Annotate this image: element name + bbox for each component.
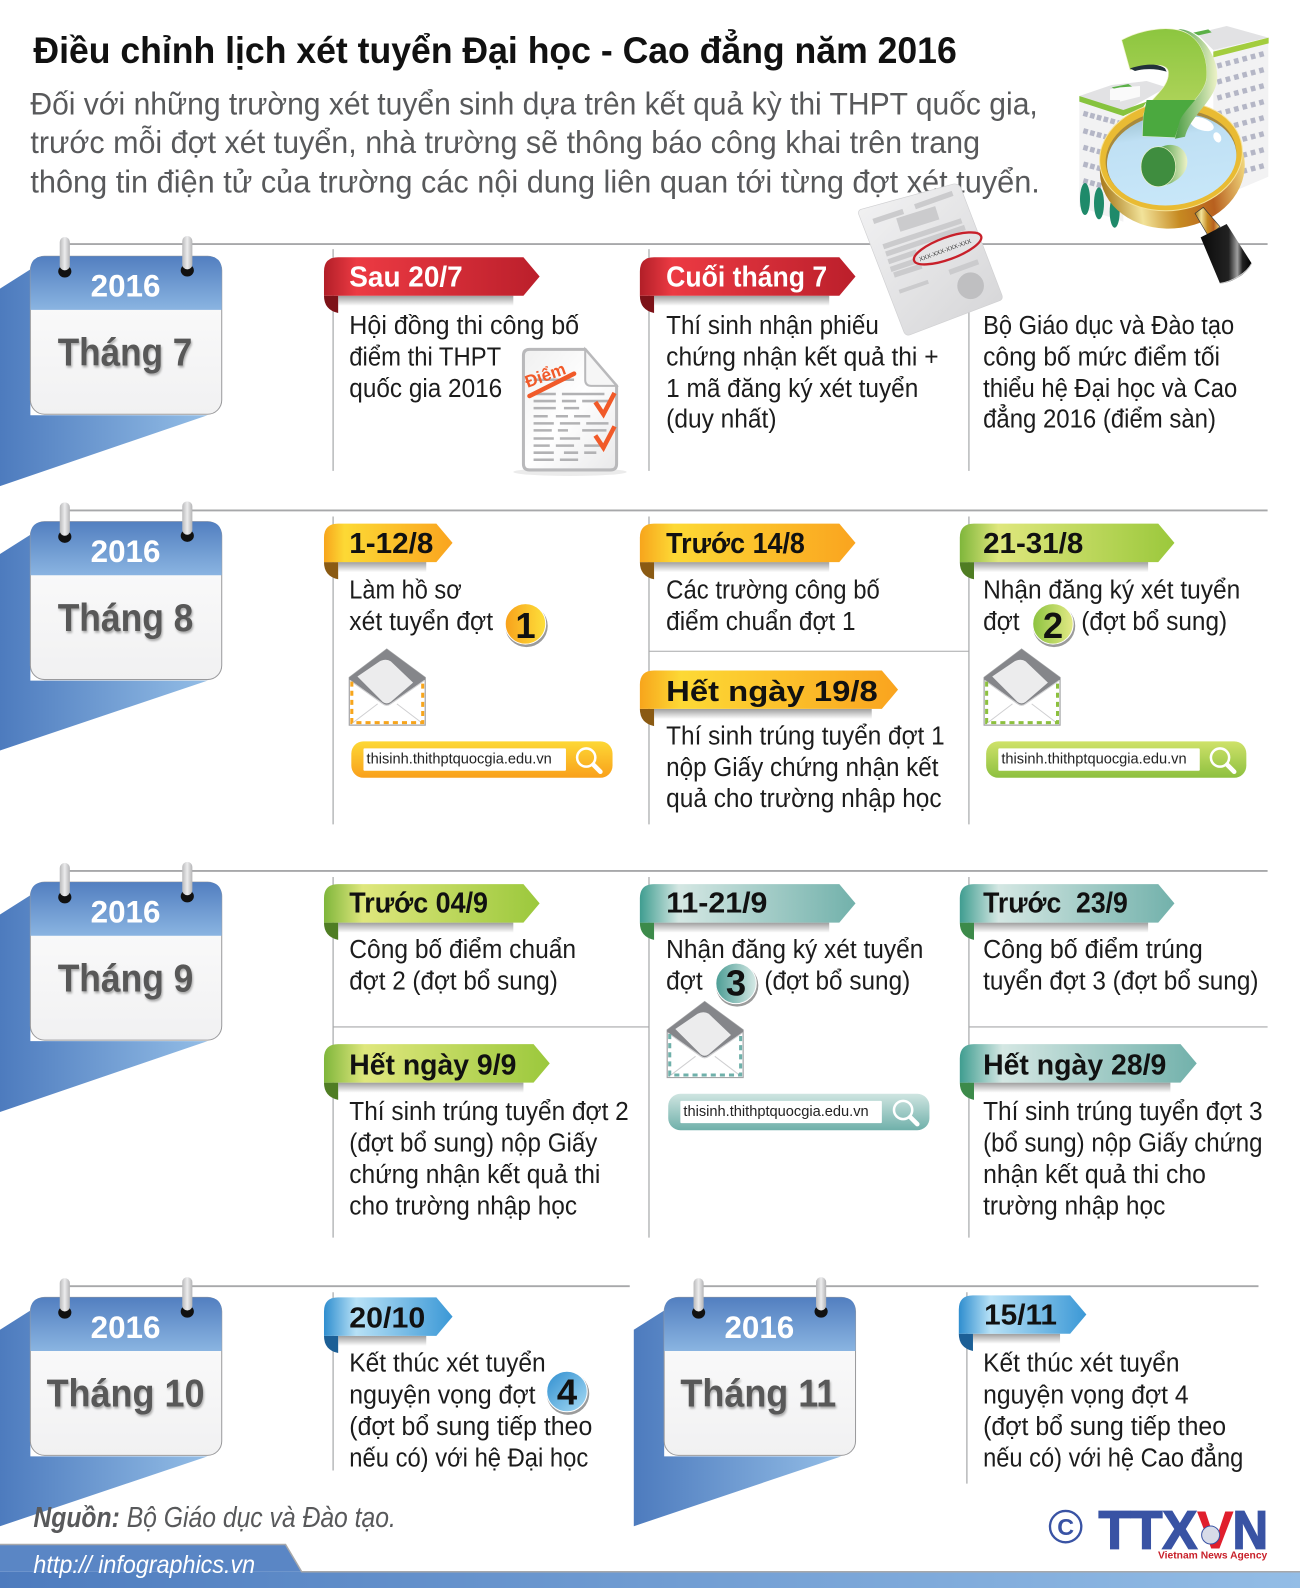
event: Hết ngày 19/8: Hết ngày 19/8 [666,676,878,708]
event: Trước 04/9 [324,884,576,995]
divider lines [66,244,1268,1484]
calendar: Tháng 7: Tháng 7 [58,332,192,375]
event: Hết ngày 9/9: Thí sinh trúng tuyển đợt 2 [349,1096,629,1126]
event: 11-21/9: (đợt bổ sung) [764,965,910,995]
event: điểm sàn: đẳng 2016 (điểm sàn) [983,403,1216,433]
icon: envelope [984,649,1060,725]
badge: 1: 1 [515,605,536,646]
event: 15/11: nguyện vọng đợt 4 [983,1380,1189,1410]
badge: 1 [505,604,548,647]
event: 20/10: nguyện vọng đợt [349,1380,536,1410]
event: Hết ngày 9/9: (đợt bổ sung) nộp Giấy [349,1127,598,1158]
event: Hết ngày 28/9: Hết ngày 28/9 [983,1050,1166,1082]
event: Hết ngày 9/9: Hết ngày 9/9 [349,1050,516,1082]
logo: TTXVN: V [1197,1501,1234,1560]
event: Trước 04/9: Trước 04/9 [349,887,488,919]
search bar [668,1094,929,1130]
intro paragraph: trước mỗi đợt xét tuyển, nhà trường sẽ thông báo công khai trên trang [30,125,980,160]
footer bar: http:// infographics.vn [33,1551,255,1579]
event: 20/10: nếu có) với hệ Đại học [349,1442,588,1472]
event: Cuối tháng 7: chứng nhận kết quả thi + [666,342,939,372]
icon: score sheet document: Điểm [522,358,568,392]
event: Cuối tháng 7: Thí sinh nhận phiếu [666,310,879,340]
event: 15/11: Kết thúc xét tuyển [983,1347,1180,1377]
calendar: Tháng 10: 2016 [91,1310,160,1345]
event: 11-21/9: đợt [666,965,703,995]
event: điểm sàn: công bố mức điểm tối [983,342,1220,372]
badge: 3 [716,963,758,1007]
calendar: Tháng 9: 2016 [91,895,160,930]
calendar: Tháng 8 [0,501,222,750]
calendar: Tháng 11 [634,1277,856,1526]
event: 20/10 [324,1297,592,1472]
event: Trước 14/8: điểm chuẩn đợt 1 [666,606,856,636]
icon: result certificate: XXX-XXX-XXX-XXX [919,239,972,263]
event: 21-31/8: 21-31/8 [983,528,1083,560]
calendar: Tháng 7 [0,236,222,486]
event: Cuối tháng 7: 1 mã đăng ký xét tuyển [666,373,918,403]
badge: 4: 4 [557,1372,578,1413]
event: Trước 23/9: Công bố điểm trúng [983,934,1203,964]
search bar [986,741,1246,778]
event: Hết ngày 19/8: nộp Giấy chứng nhận kết [666,752,939,782]
search bar: thisinh.thithptquocgia.edu.vn [683,1103,869,1120]
calendar: Tháng 11: 2016 [724,1310,794,1345]
event: 1-12/8: Làm hồ sơ [349,575,462,605]
event: Hết ngày 28/9: nhận kết quả thi cho [983,1159,1206,1189]
event: Hết ngày 19/8: Thí sinh trúng tuyển đợt 1 [666,720,945,750]
icon: envelope [667,1002,743,1078]
event: Hết ngày 28/9: trường nhập học [983,1190,1165,1220]
search bar: thisinh.thithptquocgia.edu.vn [367,751,552,768]
logo: TTXVN: Vietnam News Agency [1158,1550,1268,1561]
event: Trước 23/9: tuyển đợt 3 (đợt bổ sung) [983,965,1258,995]
calendar: Tháng 8: 2016 [91,534,160,569]
event: 20/10: Kết thúc xét tuyển [349,1347,546,1377]
calendar: Tháng 8: Tháng 8 [58,597,193,640]
event: 15/11 [959,1295,1243,1472]
logo: TTXVN: C [1057,1514,1074,1540]
event: Hết ngày 19/8 [640,670,945,813]
event: Hết ngày 28/9 [960,1044,1263,1220]
logo: TTXVN: TTX [1099,1501,1198,1560]
source: Nguồn: Bộ Giáo dục và Đào tạo. [33,1502,396,1534]
event: Hết ngày 9/9: chứng nhận kết quả thi [349,1159,600,1189]
event: Trước 04/9: đợt 2 (đợt bổ sung) [349,965,558,995]
intro paragraph: thông tin điện tử của trường các nội dung liên quan tới từng đợt xét tuyển. [30,164,1040,199]
event: Cuối tháng 7: Cuối tháng 7 [666,262,827,294]
calendar: Tháng 10: Tháng 10 [47,1373,205,1416]
event: 1-12/8: xét tuyển đợt [349,606,494,636]
icon: buildings, question mark and magnifier [1079,26,1269,283]
event: 21-31/8: Nhận đăng ký xét tuyển [983,575,1240,605]
event: Trước 14/8: Trước 14/8 [666,528,805,560]
event: 11-21/9 [640,884,929,1130]
event: Trước 14/8 [640,524,880,636]
event: 15/11: 15/11 [984,1300,1057,1332]
event: điểm sàn [983,310,1237,433]
calendar: Tháng 10 [0,1277,222,1526]
calendar: Tháng 9: Tháng 9 [58,957,193,1000]
badge: 2 [1033,604,1075,647]
intro paragraph: Đối với những trường xét tuyển sinh dựa trên kết quả kỳ thi THPT quốc gia, [30,86,1038,121]
event: điểm sàn: Bộ Giáo dục và Đào tạo [983,310,1234,340]
event: 11-21/9: Nhận đăng ký xét tuyển [666,934,923,964]
event: Sau 20/7: Hội đồng thi công bố [349,310,579,340]
event: Hết ngày 28/9: (bổ sung) nộp Giấy chứng [983,1127,1263,1158]
footer bar [0,1544,1300,1588]
search bar [351,741,613,778]
event: Trước 23/9 [960,884,1258,995]
event: 21-31/8 [960,524,1246,778]
event: 15/11: nếu có) với hệ Cao đẳng [983,1442,1243,1472]
event: Cuối tháng 7: (duy nhất) [666,403,777,433]
logo: TTXVN [1050,1501,1268,1561]
event: Trước 04/9: Công bố điểm chuẩn [349,934,576,964]
intro paragraph [30,86,1040,199]
event: Trước 23/9: Trước 23/9 [983,887,1128,919]
event: 21-31/8: (đợt bổ sung) [1081,606,1227,636]
calendar: Tháng 9 [0,862,222,1112]
badge: 4 [547,1371,589,1415]
event: 1-12/8: 1-12/8 [349,528,433,560]
icon: score sheet document [513,349,627,476]
event: Hết ngày 9/9: cho trường nhập học [349,1190,577,1220]
event: Hết ngày 19/8: quả cho trường nhập học [666,783,942,813]
event: Cuối tháng 7 [640,257,939,433]
badge: 3: 3 [726,963,746,1004]
event: điểm sàn: thiểu hệ Đại học và Cao [983,373,1237,403]
event: 20/10: 20/10 [349,1303,425,1335]
event: 20/10: (đợt bổ sung tiếp theo [349,1411,592,1441]
logo: TTXVN: N [1233,1501,1268,1560]
calendar: Tháng 11: Tháng 11 [680,1373,836,1416]
event: 1-12/8 [324,524,613,778]
title: Điều chỉnh lịch xét tuyển Đại học - Cao đẳng năm 2016 [33,29,957,71]
event: 21-31/8: đợt [983,606,1020,636]
calendar: Tháng 7: 2016 [91,269,160,304]
event: Hết ngày 28/9: Thí sinh trúng tuyển đợt 3 [983,1096,1263,1126]
icon: envelope [349,649,425,725]
event: 15/11: (đợt bổ sung tiếp theo [983,1411,1226,1441]
event: Sau 20/7: Sau 20/7 [349,262,463,294]
event: Hết ngày 9/9 [324,1044,629,1220]
event: Sau 20/7: quốc gia 2016 [349,373,502,403]
search bar: thisinh.thithptquocgia.edu.vn [1001,751,1187,768]
event: 11-21/9: 11-21/9 [666,887,767,919]
event: Sau 20/7 [324,257,579,403]
icon: result certificate [858,184,1002,335]
event: Sau 20/7: điểm thi THPT [349,342,501,372]
event: Trước 14/8: Các trường công bố [666,575,880,605]
badge: 2: 2 [1043,605,1063,646]
